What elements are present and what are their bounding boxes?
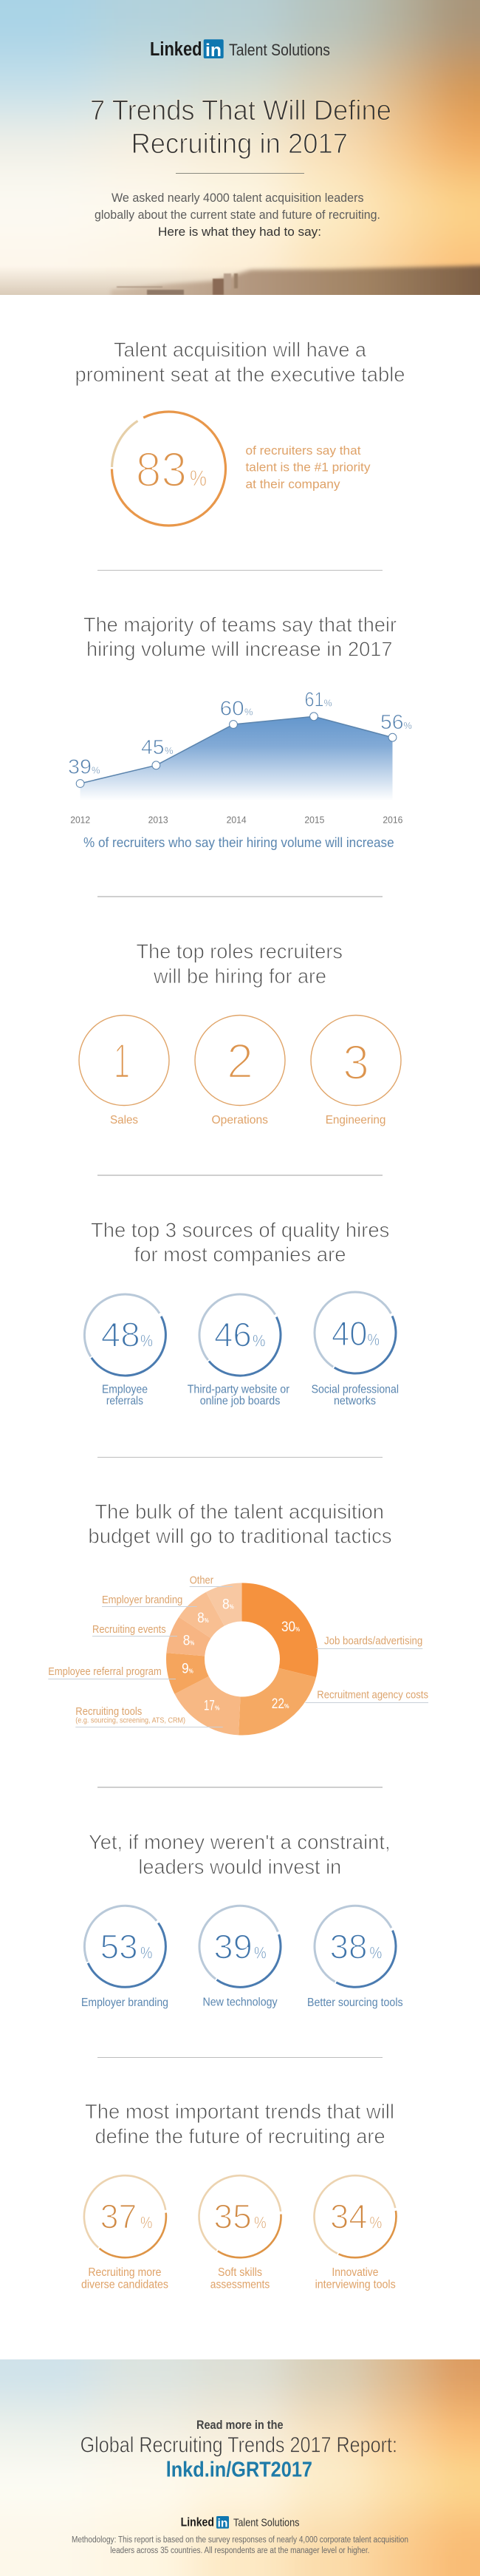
stat: third-party websites 46 percent: 46 <box>214 1316 252 1354</box>
panel: hiring volume <box>68 613 412 850</box>
donut chart: 8 <box>222 1597 230 1613</box>
label: Other: Other <box>190 1574 213 1587</box>
stat: social professional networks 40 percent: % <box>368 1331 380 1349</box>
panel: future trends <box>67 2100 410 2291</box>
logo: LinkedIn Talent Solutions <box>150 39 330 61</box>
heading <box>91 1218 389 1266</box>
stat: diverse candidates 37 percent: % <box>140 2213 152 2232</box>
logo: LinkedIn Talent Solutions: in <box>205 41 222 61</box>
stat: interviewing tools 34 percent: Innovative <box>332 2266 378 2279</box>
role 2: Operations <box>195 1016 285 1126</box>
panel: talent acquisition budget <box>48 1500 428 1727</box>
stat: better sourcing tools 38 percent: 38 <box>329 1927 368 1965</box>
heading: The most important trends that will <box>85 2100 394 2123</box>
donut chart: 30 <box>281 1620 295 1635</box>
label: Recruitment agency costs: Recruitment agency costs <box>317 1689 428 1702</box>
stat: diverse candidates 37 percent <box>67 2158 183 2291</box>
area chart: % <box>403 720 412 731</box>
label: Recruiting tools: (e.g. sourcing, screening, ATS, CRM) <box>75 1717 185 1725</box>
heading <box>136 940 343 988</box>
heading <box>88 1500 392 1548</box>
donut chart: % <box>189 1668 193 1674</box>
stat: employee referrals 48 percent: 48 <box>101 1316 140 1354</box>
area chart: % <box>92 765 100 776</box>
logo: LinkedIn Talent Solutions: Linked <box>150 39 202 60</box>
intro text: We asked nearly 4000 talent acquisition leaders <box>112 191 363 205</box>
stat: interviewing tools 34 percent: interviewing tools <box>315 2279 396 2291</box>
donut chart: 17 <box>204 1698 215 1713</box>
donut chart: % <box>215 1705 220 1711</box>
area chart: 45 <box>141 735 164 758</box>
area chart: 2015 <box>304 814 324 825</box>
intro text: Here is what they had to say: <box>158 225 321 239</box>
label: Job boards/advertising: Job boards/advertising <box>324 1634 422 1647</box>
callout text: talent is the #1 priority <box>245 461 371 475</box>
read more text: Read more in the <box>196 2418 284 2432</box>
area chart: 2014 <box>227 814 247 825</box>
ring: 83 percent: 83 <box>136 442 187 497</box>
donut chart: 9 <box>182 1661 189 1676</box>
methodology note: leaders across 35 countries. All respondents are at the manager level or higher. <box>110 2546 369 2555</box>
panel: executive table <box>75 339 405 545</box>
callout text: of recruiters say that <box>245 444 361 458</box>
role 1: Sales <box>79 1016 169 1126</box>
heading: hiring volume will increase in 2017 <box>86 638 393 661</box>
stat: employee referrals 48 percent: Employee <box>102 1383 148 1396</box>
panel: sources of quality hires <box>69 1218 411 1407</box>
heading: The bulk of the talent acquisition <box>95 1500 384 1523</box>
label: Recruiting tools <box>75 1705 223 1727</box>
stat: third-party websites 46 percent: Third-party website or <box>188 1383 290 1396</box>
stat: diverse candidates 37 percent: Recruiting more <box>88 2266 162 2279</box>
role 1: Sales: Sales <box>110 1114 138 1126</box>
panel: money not a constraint <box>69 1831 411 2009</box>
stat: social professional networks 40 percent: 40 <box>332 1314 368 1353</box>
area chart: % <box>244 706 253 717</box>
label: Recruiting events: Recruiting events <box>92 1623 166 1636</box>
ring: 83 percent <box>93 392 244 545</box>
area chart: 2012 <box>70 814 90 825</box>
area chart: % <box>324 698 332 709</box>
donut chart: % <box>230 1604 234 1611</box>
heading: Talent acquisition will have a <box>114 339 366 361</box>
logo: LinkedIn Talent Solutions footer: in <box>217 2518 227 2529</box>
area chart: 2016 <box>383 814 402 825</box>
heading: will be hiring for are <box>153 965 326 988</box>
donut chart: 8 <box>183 1634 190 1649</box>
stat: social professional networks 40 percent: networks <box>334 1395 376 1407</box>
role 2: Operations: 2 <box>227 1033 253 1088</box>
stat: third-party websites 46 percent: % <box>253 1332 266 1350</box>
methodology note <box>72 2535 408 2555</box>
label: Recruiting tools: Recruiting tools <box>75 1705 142 1718</box>
stat: diverse candidates 37 percent: diverse candidates <box>81 2279 168 2291</box>
heading <box>83 613 397 661</box>
heading <box>89 1831 391 1878</box>
stat: diverse candidates 37 percent: 37 <box>100 2197 137 2235</box>
report title: Global Recruiting Trends 2017 Report: <box>80 2433 397 2458</box>
donut chart: 8 <box>197 1611 205 1626</box>
stat: third-party websites 46 percent <box>183 1278 297 1407</box>
role 1: Sales: 1 <box>114 1033 130 1088</box>
area chart: 61 <box>304 688 323 711</box>
heading: for most companies are <box>134 1243 346 1266</box>
stat: employee referrals 48 percent <box>69 1279 181 1407</box>
heading: define the future of recruiting are <box>95 2124 385 2147</box>
chart caption: % of recruiters who say their hiring volume will increase <box>83 835 394 850</box>
stat: interviewing tools 34 percent: % <box>369 2213 382 2232</box>
stat: employee referrals 48 percent: % <box>140 1332 153 1350</box>
label: Other <box>190 1574 233 1587</box>
logo: LinkedIn Talent Solutions footer <box>181 2515 300 2529</box>
donut chart: % <box>284 1703 289 1710</box>
area chart: 56 <box>380 710 403 733</box>
title: Recruiting in 2017 <box>131 129 348 160</box>
panel: footer <box>0 2359 480 2576</box>
logo: LinkedIn Talent Solutions footer: Linked <box>181 2515 214 2529</box>
heading <box>75 339 405 386</box>
heading: prominent seat at the executive table <box>75 363 405 386</box>
donut chart <box>182 1597 300 1716</box>
label: Employer branding: Employer branding <box>102 1594 182 1606</box>
stat: third-party websites 46 percent: online job boards <box>200 1395 280 1407</box>
heading: Yet, if money weren't a constraint, <box>89 1831 391 1854</box>
logo: LinkedIn Talent Solutions footer: Talent Solutions <box>233 2517 300 2529</box>
stat: soft skills 35 percent: assessments <box>210 2279 270 2291</box>
stat: social professional networks 40 percent: Social professional <box>312 1383 399 1396</box>
stat: interviewing tools 34 percent: 34 <box>330 2197 368 2235</box>
stat: employee referrals 48 percent: referrals <box>106 1395 143 1407</box>
intro text <box>95 191 380 239</box>
stat: employer branding 53 percent <box>69 1890 182 2009</box>
role 3: Engineering <box>311 1016 401 1126</box>
intro text: globally about the current state and future of recruiting. <box>95 208 380 222</box>
footer sky background <box>0 2359 480 2576</box>
heading <box>85 2100 394 2147</box>
hero sky background <box>0 0 480 295</box>
area chart: 60 <box>220 696 244 719</box>
role 2: Operations: Operations <box>211 1114 268 1126</box>
heading: The top roles recruiters <box>136 940 343 963</box>
stat: better sourcing tools 38 percent: Better sourcing tools <box>307 1996 403 2009</box>
stat: better sourcing tools 38 percent: % <box>369 1943 382 1962</box>
logo: LinkedIn Talent Solutions: Talent Solutions <box>229 41 330 59</box>
callout text <box>245 444 371 492</box>
donut chart: 22 <box>272 1696 284 1712</box>
stat: new technology 39 percent <box>183 1889 297 2008</box>
panel: hero header <box>0 0 480 295</box>
ring: 83 percent: % <box>190 466 207 491</box>
stat: soft skills 35 percent: % <box>254 2213 267 2232</box>
title <box>90 95 391 160</box>
stat: soft skills 35 percent: 35 <box>213 2197 252 2235</box>
stat: employer branding 53 percent: 53 <box>100 1927 138 1965</box>
stat: employer branding 53 percent: Employer branding <box>81 1996 168 2009</box>
panel: top roles <box>79 940 401 1126</box>
heading: The top 3 sources of quality hires <box>91 1218 389 1241</box>
area chart <box>68 688 412 825</box>
stat: new technology 39 percent: New technology <box>202 1996 278 2008</box>
stat: interviewing tools 34 percent <box>301 2161 410 2291</box>
area chart: 39 <box>68 755 92 778</box>
heading: budget will go to traditional tactics <box>88 1525 392 1548</box>
report link: lnkd.in/GRT2017 <box>166 2458 312 2482</box>
callout text: at their company <box>245 478 340 492</box>
donut chart: % <box>295 1626 300 1633</box>
role 3: Engineering: Engineering <box>326 1114 385 1126</box>
stat: soft skills 35 percent: Soft skills <box>218 2266 262 2279</box>
role 3: Engineering: 3 <box>343 1035 369 1090</box>
title: 7 Trends That Will Define <box>90 95 391 126</box>
area chart: 2013 <box>148 814 168 825</box>
stat: better sourcing tools 38 percent <box>300 1891 411 2009</box>
area chart: % <box>165 745 174 756</box>
stat: social professional networks 40 percent <box>299 1277 411 1407</box>
heading: The majority of teams say that their <box>83 613 397 636</box>
label: Employee referral program: Employee referral program <box>48 1665 162 1678</box>
stat: new technology 39 percent: 39 <box>213 1927 253 1965</box>
stat: soft skills 35 percent <box>183 2159 297 2291</box>
donut chart: % <box>190 1640 194 1647</box>
heading: leaders would invest in <box>138 1855 341 1878</box>
stat: new technology 39 percent: % <box>254 1943 267 1962</box>
stat: employer branding 53 percent: % <box>140 1943 152 1962</box>
donut chart: % <box>205 1617 209 1624</box>
methodology note: Methodology: This report is based on the survey responses of nearly 4,000 corporate talent acquisition <box>72 2535 408 2544</box>
